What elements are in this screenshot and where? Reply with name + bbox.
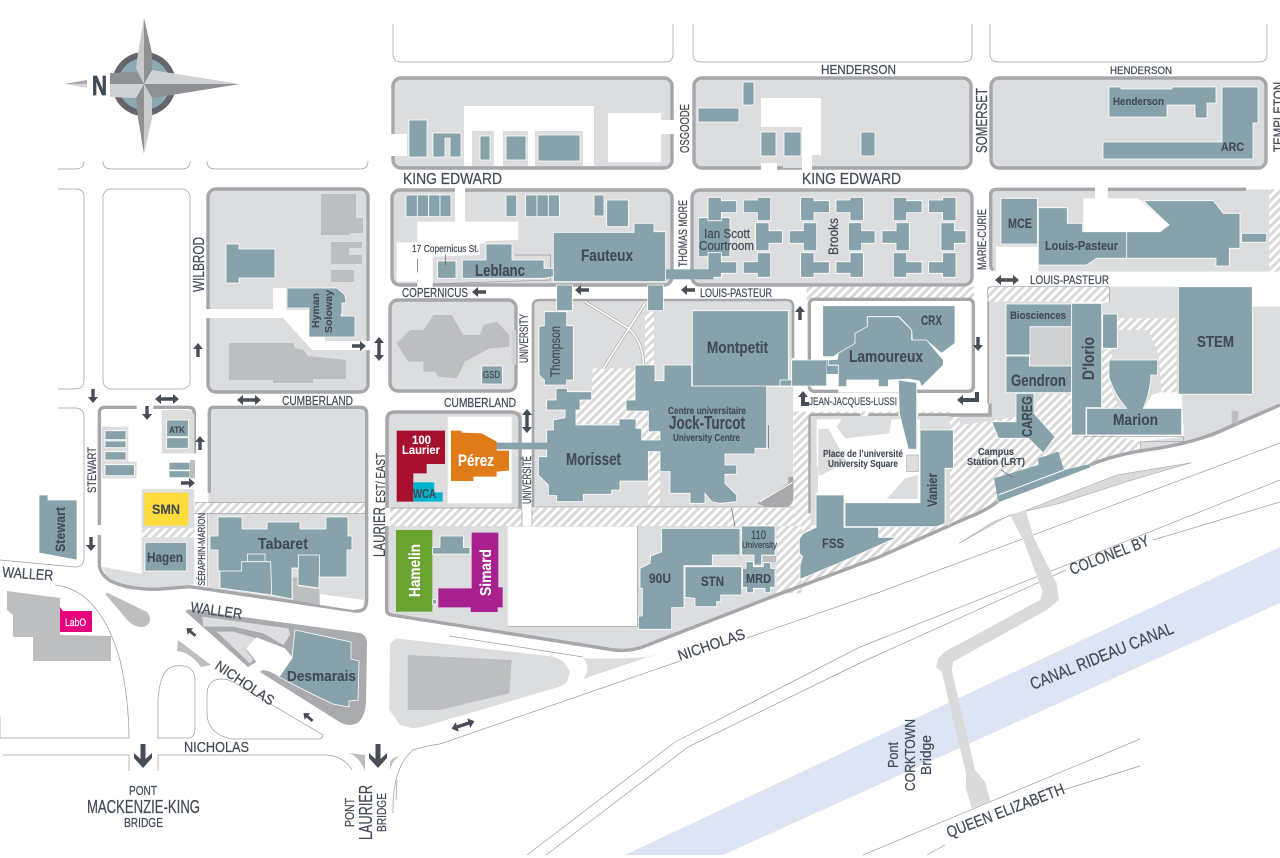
building: Biosciences: Biosciences — [1010, 310, 1066, 322]
building: SMN: SMN — [152, 501, 180, 517]
building: Hagen: Hagen — [147, 549, 183, 565]
arrow: down Stewart — [86, 537, 96, 551]
building: 110 University: 110 — [751, 528, 766, 542]
panel: Desmarais block — [186, 609, 367, 725]
arrow: up ATK — [195, 436, 205, 450]
panel: Perez block — [387, 412, 548, 508]
street labels: THOMAS MORE — [676, 200, 690, 267]
building: MRD: MRD — [746, 571, 771, 586]
building: 110 University: University — [742, 540, 777, 550]
arrow: big down Laurier bridge — [369, 744, 387, 768]
building: Vanier: Vanier — [924, 473, 940, 507]
street labels: COPERNICUS — [402, 285, 468, 300]
compass rose: N — [92, 70, 107, 101]
street labels: KING EDWARD — [403, 171, 502, 188]
text: Place de l'université University Square: Place de l’université — [823, 448, 903, 460]
panel: block north-west of King Edward — [389, 78, 674, 168]
arrow: left Louis-Pasteur west — [575, 285, 589, 295]
street labels: CANAL RIDEAU CANAL — [1027, 619, 1176, 694]
panel: Lamoureux block — [780, 299, 973, 393]
street labels: NICHOLAS — [184, 739, 249, 756]
street labels: LAURIER — [370, 507, 389, 557]
street labels: COLONEL BY — [1067, 533, 1152, 579]
top open blocks — [393, 24, 1267, 62]
street labels: STEWART — [87, 447, 99, 493]
building: Morisset and Jock-Turcot University Centre: Centre universitaire — [668, 405, 746, 417]
building: Thompson: Thompson — [547, 326, 563, 377]
building: Desmarais — [279, 630, 359, 707]
arrow: left Copernicus — [472, 287, 486, 297]
hatched walkway band — [390, 500, 808, 528]
panel: block north-centre — [694, 78, 971, 170]
building: Morisset and Jock-Turcot University Centre — [538, 365, 791, 503]
building: D'Iorio: D'Iorio — [1079, 337, 1098, 380]
panel: south block with 90U, STN, MRD, Hamelin, Simard — [386, 526, 880, 651]
text: Place de l'université University Square — [823, 448, 903, 470]
bridge labels: LAURIER — [356, 785, 376, 840]
building: Fauteux — [553, 223, 666, 282]
building: Montpetit — [692, 311, 788, 386]
panel: University Square — [811, 380, 953, 527]
building: Vanier — [845, 430, 953, 527]
building: Biosciences — [1006, 304, 1072, 355]
building: Fauteux: Fauteux — [581, 246, 633, 265]
arrow: double horizontal Cumberland — [237, 395, 261, 405]
arrow: double vertical University — [522, 409, 532, 433]
building: CAREG — [992, 393, 1055, 453]
building: Lamoureux: Lamoureux — [849, 347, 923, 366]
building: Hamelin: Hamelin — [407, 544, 424, 597]
bridge labels: BRIDGE — [374, 793, 389, 832]
panel: island parking lot — [389, 638, 570, 728]
building: Morisset and Jock-Turcot University Centre: Jock-Turcot — [669, 413, 745, 433]
street labels: LOUIS-PASTEUR — [700, 286, 772, 300]
building: GSD: GSD — [483, 370, 500, 381]
building: ARC — [1103, 87, 1258, 159]
building: Lamoureux to Vanier link — [898, 380, 917, 449]
panel: LabO building — [7, 591, 111, 661]
building: Thompson — [539, 312, 573, 385]
building: SMN — [144, 493, 188, 526]
street labels: UNIVERSITÉ — [519, 456, 534, 504]
street labels: CUMBERLAND — [444, 396, 516, 410]
arrow: right Wilbrod lane — [352, 341, 366, 351]
bridge labels: PONT — [342, 798, 357, 827]
building: Ian Scott Courtroom: Courtroom — [699, 238, 754, 253]
building: 110 University — [742, 526, 777, 565]
street labels: NICHOLAS — [676, 626, 747, 665]
street labels: UNIVERSITY — [517, 314, 531, 363]
bridge labels: CORKTOWN — [902, 719, 919, 791]
street labels: HENDERSON — [1110, 65, 1172, 77]
building: LabO: LabO — [65, 617, 86, 629]
connectors between buildings — [557, 269, 713, 311]
arrow: north-west Nicholas — [184, 625, 198, 639]
street labels: MARIE-CURIE — [975, 209, 989, 270]
building: ATK: ATK — [169, 425, 185, 436]
building: Morisset and Jock-Turcot University Centre: Morisset — [566, 449, 621, 469]
building: Tabaret: Tabaret — [258, 536, 309, 553]
building: Leblanc — [462, 244, 553, 280]
building: Louis-Pasteur — [1038, 208, 1127, 265]
building: WCA: WCA — [413, 486, 436, 501]
panel: Wilbrod block with Hyman Soloway — [205, 189, 371, 392]
building: CRX: CRX — [921, 312, 942, 328]
arrow: big down Mackenzie-King — [134, 744, 152, 768]
building: Morisset and Jock-Turcot University Centre: University Centre — [673, 432, 740, 444]
traffic arrows — [86, 275, 1019, 768]
arrow: down Stewart lot — [142, 406, 152, 420]
building: 90U: 90U — [649, 570, 671, 586]
building: FSS: FSS — [822, 535, 844, 551]
arrow: right SMN — [181, 478, 195, 488]
building: Gendron — [1006, 356, 1072, 393]
bridge labels: BRIDGE — [124, 815, 163, 830]
street labels: CUMBERLAND — [282, 394, 353, 408]
street labels: NICHOLAS — [212, 657, 278, 709]
arrow: bent up Jean-Jacques-Lussier — [798, 391, 809, 406]
street labels: WALLER — [2, 564, 54, 585]
building: Simard: Simard — [478, 549, 495, 596]
street labels: OSGOODE — [677, 104, 692, 153]
panel: Fauteux block — [392, 187, 672, 288]
building: Campus Station LRT — [967, 446, 1090, 502]
building: MCE — [1001, 198, 1037, 244]
building: STEM: STEM — [1197, 334, 1234, 351]
building: Ian Scott Courtroom: Ian Scott — [704, 226, 750, 241]
building: Gendron: Gendron — [1011, 371, 1066, 390]
arrow: double horizontal Nicholas — [450, 717, 476, 733]
street labels: HENDERSON — [821, 62, 896, 77]
building: Campus Station LRT: Station (LRT) — [967, 456, 1025, 468]
street labels: WILBROD — [191, 237, 208, 292]
panel: Stewart block with SMN, Hagen — [39, 407, 195, 589]
bridge labels: Bridge — [918, 735, 935, 775]
street labels: SOMERSET — [974, 88, 991, 153]
building: Ian Scott Courtroom — [698, 197, 782, 277]
building: STN: STN — [701, 573, 724, 589]
arrow: bent left Jean-Jacques-Lussier — [957, 392, 979, 405]
street labels: EST/ EAST — [373, 453, 388, 503]
street labels: KING EDWARD — [802, 171, 901, 188]
arrow: up Wilbrod — [193, 343, 203, 357]
street labels: WALLER — [189, 599, 243, 623]
text: 17 Copernicus St.: 17 Copernicus St. — [412, 244, 479, 255]
panel: GSD block — [390, 300, 516, 391]
arrow: double vertical Laurier — [374, 337, 384, 361]
arrow: double horizontal Louis-Pasteur — [995, 275, 1019, 285]
bridge labels: Pont — [885, 741, 902, 768]
building: Tabaret — [210, 517, 352, 599]
text: Place de l'université University Square: University Square — [828, 458, 898, 470]
building: Pérez — [451, 431, 509, 481]
Corktown bridge path — [936, 510, 1059, 808]
building: FSS — [799, 495, 897, 579]
building: ATK — [167, 420, 188, 448]
bridge labels: PONT — [129, 783, 157, 798]
traffic islands — [106, 593, 660, 771]
street labels: JEAN-JACQUES-LUSSI — [809, 396, 897, 408]
building: Lamoureux — [828, 317, 943, 387]
building: MRD — [743, 562, 775, 593]
building: Henderson: Henderson — [1113, 96, 1164, 108]
building: Henderson — [1109, 87, 1216, 118]
building: CAREG: CAREG — [1019, 396, 1036, 437]
building: ARC: ARC — [1221, 140, 1244, 154]
building: Leblanc: Leblanc — [475, 261, 525, 280]
panel: Brooks and Ian Scott block — [692, 190, 972, 285]
building: Hagen — [145, 542, 187, 571]
building: Marion: Marion — [1113, 412, 1158, 429]
street labels: LOUIS-PASTEUR — [1030, 273, 1109, 287]
arrow: double horizontal Cumberland west — [155, 394, 179, 404]
road lines west — [0, 161, 397, 800]
compass rose — [64, 18, 240, 154]
building: 90U — [638, 528, 740, 629]
panel: science complex — [967, 287, 1252, 502]
road lines south-east — [393, 443, 1280, 855]
building: Stewart: Stewart — [52, 507, 68, 552]
arrow: down Marie-Curie — [973, 337, 983, 351]
arrow: north-west Desmarais — [301, 710, 315, 724]
building: Hyman Soloway — [287, 288, 355, 337]
panel: Louis-Pasteur block — [990, 187, 1280, 273]
bridge labels: MACKENZIE-KING — [87, 797, 200, 817]
building: STEM — [1178, 287, 1252, 394]
panel: south-east campus hatch and grounds — [777, 287, 1280, 594]
street labels: QUEEN ELIZABETH — [944, 781, 1067, 842]
building: D'Iorio — [1072, 303, 1102, 435]
building: Hyman Soloway: Soloway — [323, 290, 335, 333]
building: STN — [685, 567, 742, 607]
building: Montpetit: Montpetit — [707, 338, 768, 357]
building: Louis-Pasteur: Louis-Pasteur — [1045, 238, 1118, 253]
arrow: up east of Montpetit — [795, 306, 805, 320]
building: 100 Laurier — [397, 431, 445, 502]
building: Brooks — [789, 197, 966, 277]
building: Campus Station LRT: Campus — [978, 446, 1014, 458]
building: CRX — [823, 306, 955, 357]
panel: block north-east with Henderson and ARC — [991, 78, 1266, 168]
arrow: left Louis-Pasteur — [681, 285, 695, 295]
building: Brooks: Brooks — [825, 218, 841, 255]
Rideau Canal water — [625, 547, 1280, 855]
building: Marion — [1087, 360, 1182, 435]
building: 100 Laurier: 100 — [412, 435, 431, 447]
bridge labels — [87, 719, 935, 840]
building: Stewart — [39, 495, 77, 560]
building: Hamelin — [396, 530, 432, 612]
building: Pérez: Pérez — [458, 451, 494, 470]
building: MCE: MCE — [1008, 215, 1032, 231]
street labels: SÉRAPHIN-MARION — [195, 513, 208, 586]
arrow: down Stewart north — [88, 389, 98, 403]
building: 100 Laurier: Laurier — [402, 445, 440, 457]
panel: Tabaret block — [190, 407, 367, 611]
LRT platform wedge — [959, 463, 1192, 543]
building: Hyman Soloway: Hyman — [310, 293, 322, 328]
building: Desmarais: Desmarais — [287, 668, 356, 685]
building: Simard — [438, 533, 503, 612]
panel: central campus block — [533, 300, 795, 507]
